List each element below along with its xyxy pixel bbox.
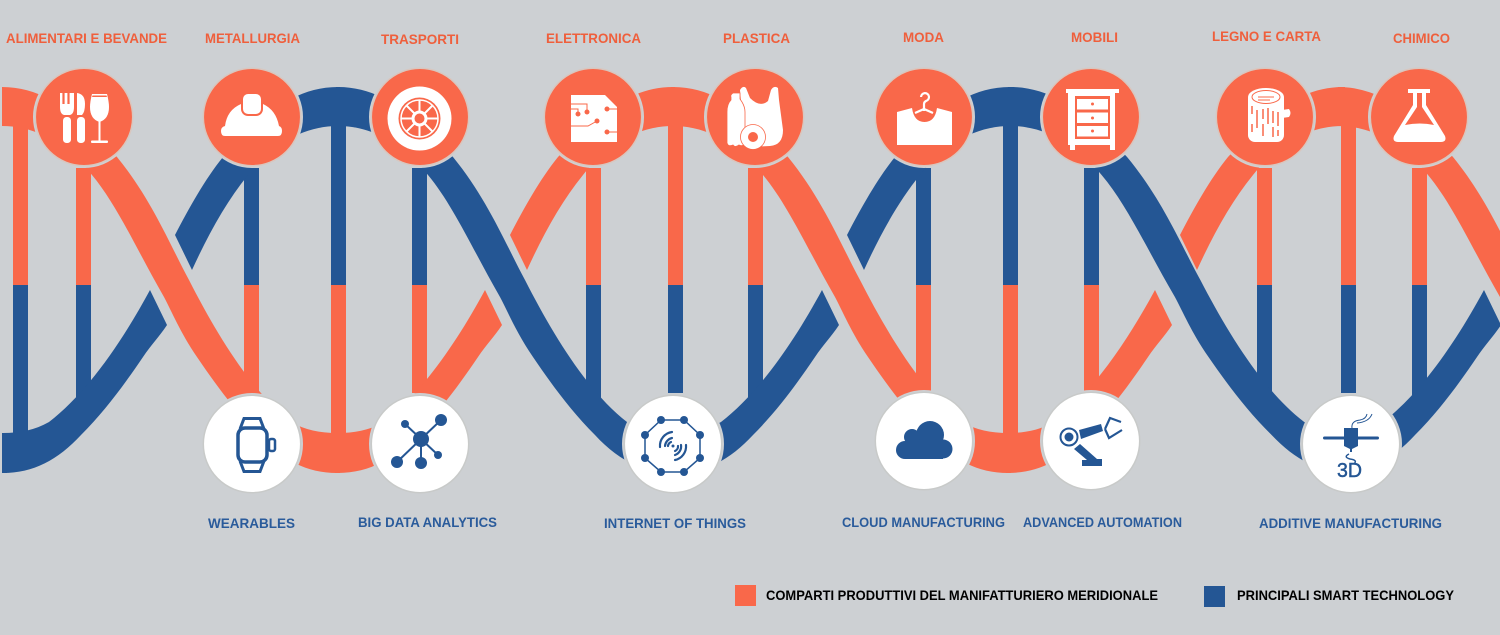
top labels: TRASPORTI bbox=[381, 31, 459, 47]
vertical rungs bbox=[13, 126, 1427, 435]
legend bbox=[735, 585, 1455, 607]
icon: hanger and garment bbox=[873, 66, 975, 168]
top labels: LEGNO E CARTA bbox=[1212, 28, 1321, 44]
bottom labels: BIG DATA ANALYTICS bbox=[358, 514, 497, 530]
orange helix strand bbox=[2, 87, 1500, 473]
bottom labels: WEARABLES bbox=[208, 515, 295, 531]
blue helix strand bbox=[2, 87, 1500, 473]
bottom labels: ADDITIVE MANUFACTURING bbox=[1259, 515, 1442, 531]
icon: food and drink bbox=[33, 66, 135, 168]
bottom labels: CLOUD MANUFACTURING bbox=[842, 514, 1005, 530]
icon: 3D printer bbox=[1300, 393, 1402, 495]
icon: plastic bottle and bag bbox=[704, 66, 806, 168]
top labels: ALIMENTARI E BEVANDE bbox=[6, 30, 167, 46]
icon: 3D printer: 3D bbox=[1337, 460, 1362, 482]
icon: chemistry flask bbox=[1368, 66, 1470, 168]
icon: wood log bbox=[1214, 66, 1316, 168]
icon: big data network bbox=[369, 393, 471, 495]
top labels: MOBILI bbox=[1071, 29, 1118, 45]
top labels bbox=[6, 28, 1450, 47]
icon: chest of drawers bbox=[1040, 66, 1142, 168]
icon: robotic arm bbox=[1040, 390, 1142, 492]
bottom labels: INTERNET OF THINGS bbox=[604, 515, 746, 531]
icon: internet of things bbox=[622, 393, 724, 495]
top labels: MODA bbox=[903, 29, 944, 45]
icon: smartwatch bbox=[201, 393, 303, 495]
legend: PRINCIPALI SMART TECHNOLOGY bbox=[1237, 587, 1455, 603]
top labels: METALLURGIA bbox=[205, 30, 300, 46]
top labels: CHIMICO bbox=[1393, 30, 1450, 46]
bottom labels bbox=[208, 514, 1442, 531]
icon: circuit board bbox=[542, 66, 644, 168]
bottom labels: ADVANCED AUTOMATION bbox=[1023, 514, 1182, 530]
top labels: ELETTRONICA bbox=[546, 30, 641, 46]
top labels: PLASTICA bbox=[723, 30, 790, 46]
icon: hard hat bbox=[201, 66, 303, 168]
legend: COMPARTI PRODUTTIVI DEL MANIFATTURIERO MERIDIONALE bbox=[766, 587, 1158, 603]
icon: wheel bbox=[369, 66, 471, 168]
icon: cloud bbox=[873, 390, 975, 492]
